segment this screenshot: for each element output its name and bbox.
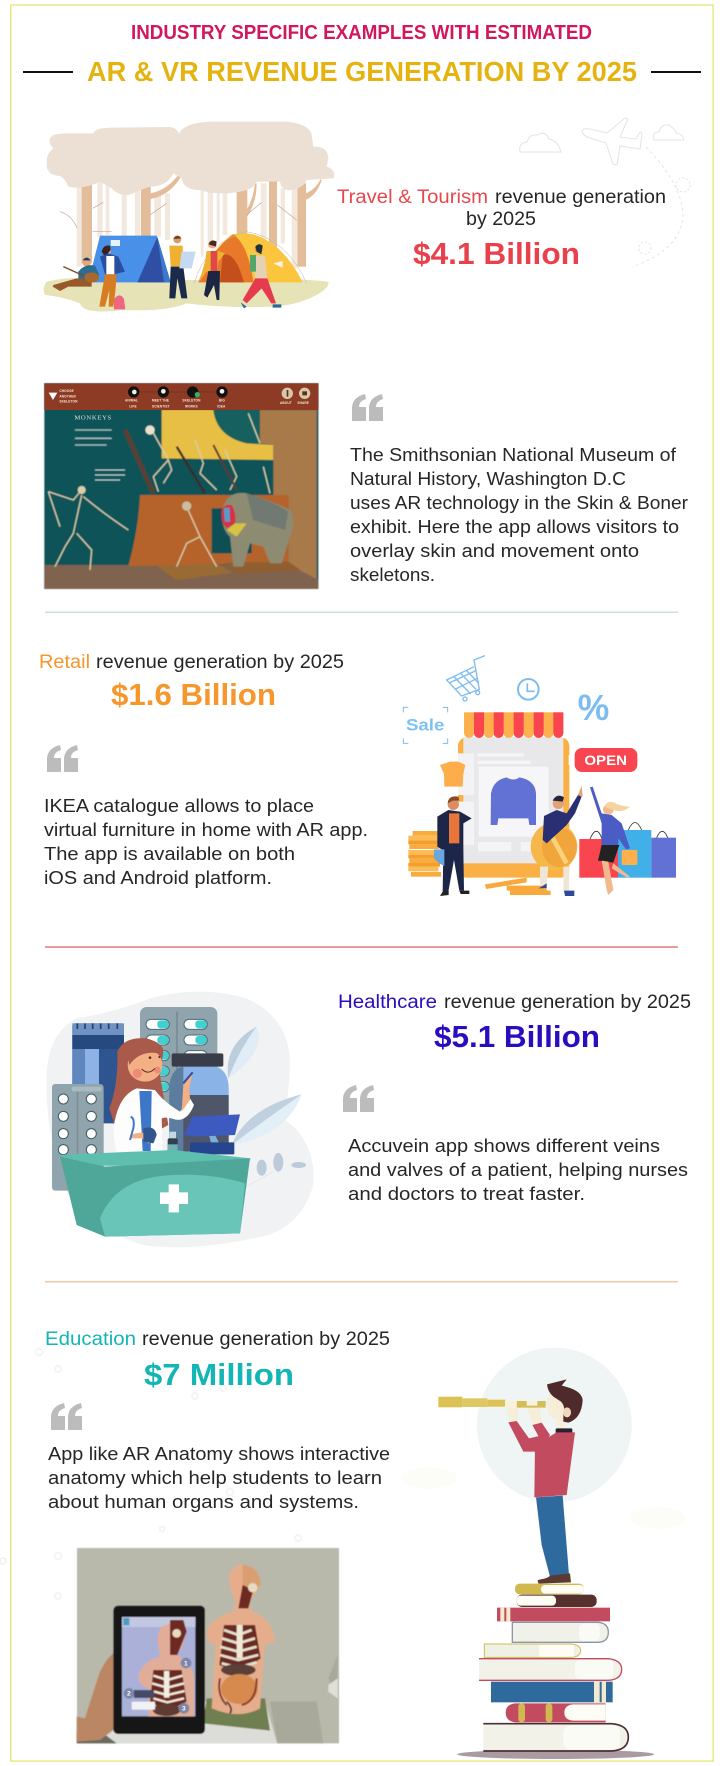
anatomy torso (207, 1565, 275, 1714)
storefront phone (458, 737, 569, 878)
panel: travel revenue text (337, 187, 666, 271)
small medicine bottle (168, 1132, 178, 1158)
value: retail revenue: $1.6 Billion (111, 677, 276, 712)
photo app header bar: SKELETON (182, 399, 201, 403)
telescope (438, 1397, 546, 1408)
photo app header bar: ABOUT (280, 401, 292, 405)
text: smithsonian description: overlay skin and movement onto (350, 541, 639, 561)
icon: quotation mark retail (47, 745, 78, 772)
doctor (109, 1038, 194, 1152)
text: ikea description: iOS and Android platform. (44, 868, 272, 888)
photo app header bar: SCIENTIST (152, 404, 170, 408)
photo app header bar: SKELETON (59, 400, 78, 404)
person: hiker (241, 244, 283, 308)
panel: education revenue text (45, 1329, 390, 1392)
text: smithsonian description: uses AR technology in the Skin & Boner (350, 493, 688, 513)
photo: anatomy model with tablet: 1 (184, 1660, 188, 1667)
icon: medical cross (160, 1184, 188, 1212)
photo app header bar: LIFE (129, 404, 137, 408)
dashed flight path (632, 147, 683, 267)
text: accuvein description (348, 1136, 688, 1204)
photo: anatomy model with tablet: 3 (182, 1706, 186, 1713)
text: ikea description: virtual furniture in home with AR app. (44, 820, 368, 840)
text: smithsonian description: The Smithsonian National Museum of (350, 445, 677, 465)
photo app header bar: MEET THE (152, 399, 169, 403)
text: ikea description: IKEA catalogue allows to place (44, 796, 314, 816)
panel: man on books illustration (438, 1348, 654, 1759)
panel: healthcare revenue text: revenue generation by 2025 (444, 992, 691, 1013)
monitor (184, 1114, 240, 1154)
value: healthcare revenue: $5.1 Billion (434, 1019, 600, 1054)
label: healthcare category: Healthcare (338, 992, 437, 1013)
icon: cloud right (653, 125, 684, 140)
value: travel revenue: $4.1 Billion (413, 236, 580, 271)
background circle (477, 1348, 632, 1502)
icon: clock (518, 679, 539, 700)
heading: line one: INDUSTRY SPECIFIC EXAMPLES WITH ESTIMATED (131, 22, 592, 44)
text: accuvein description: and valves of a patient, helping nurses (348, 1160, 688, 1180)
panel: retail revenue text: revenue generation by 2025 (96, 652, 344, 673)
text: ikea description: The app is available on both (44, 844, 295, 864)
label: retail category: Retail (39, 652, 90, 673)
panel: retail illustration (403, 656, 676, 896)
reception desk (57, 1150, 251, 1237)
photo app header bar: WORKS (185, 404, 198, 408)
icon: quotation mark smithsonian (352, 394, 383, 421)
photo app header bar: CHOOSE (59, 389, 74, 393)
person: man on phone (434, 796, 472, 896)
tablet (113, 1606, 205, 1734)
text: ar anatomy description: about human organs and systems. (48, 1492, 359, 1512)
tree canopy (47, 122, 334, 195)
label: education category: Education (45, 1329, 136, 1350)
photo app header bar (44, 383, 318, 410)
photo: smithsonian skeleton exhibit: MONKEYS (74, 414, 112, 421)
orange tent (194, 232, 307, 283)
photo app header bar: SHARE (297, 401, 309, 405)
heading: line two: AR & VR REVENUE GENERATION BY 2025 (87, 56, 637, 87)
text: ikea description (44, 796, 368, 888)
background blob (46, 992, 314, 1247)
panel: healthcare revenue text (338, 992, 691, 1054)
skeletons (48, 413, 270, 570)
text: smithsonian description (350, 445, 688, 585)
mandrill (222, 493, 293, 567)
AR callouts (181, 1658, 191, 1668)
panel: travel revenue text: revenue generation (495, 187, 666, 208)
panel: education revenue text: revenue generation by 2025 (142, 1329, 390, 1350)
panel: header (23, 22, 701, 87)
text: ar anatomy description: anatomy which help students to learn (48, 1468, 382, 1488)
shadow (457, 1750, 654, 1759)
loose coins (485, 878, 551, 895)
value: education revenue: $7 Million (144, 1357, 294, 1392)
label: sale tag (403, 707, 448, 743)
panel: healthcare illustration (46, 992, 314, 1247)
person: guitar player (53, 258, 99, 291)
faint background pins and clouds (0, 1348, 686, 1599)
photo app header bar: ANIMAL (125, 399, 138, 403)
label: travel category: Travel & Tourism (337, 187, 488, 208)
photo: smithsonian skeleton exhibit (44, 383, 318, 589)
icon: airplane (582, 118, 642, 165)
awning (464, 712, 563, 738)
bottle right (169, 1053, 229, 1152)
person: man high five (539, 786, 583, 896)
icon: quotation mark education (51, 1403, 82, 1430)
ground (44, 278, 328, 311)
text: ar anatomy description (48, 1444, 390, 1512)
panel: retail revenue text (39, 652, 344, 712)
person: woman high five (590, 787, 637, 895)
icon: cloud left (520, 133, 561, 152)
text: smithsonian description: skeletons. (350, 565, 435, 585)
icon: quotation mark healthcare (343, 1085, 374, 1112)
panel: travel revenue text: by 2025 (466, 209, 536, 230)
hand (77, 1653, 120, 1742)
text: smithsonian description: Natural History, Washington D.C (350, 469, 626, 489)
person: woman in yellow coat (199, 240, 225, 300)
sign: open (569, 748, 637, 772)
person: woman on phone (99, 245, 125, 309)
photo app header bar: BIG (219, 399, 225, 403)
person: man with map (169, 235, 196, 298)
photo: anatomy model with tablet: 2 (127, 1691, 131, 1698)
panel: travel decoration plane and clouds (520, 118, 690, 267)
pill blister front (52, 1084, 104, 1191)
panel: travel and tourism illustration (44, 122, 334, 311)
coin large (531, 823, 577, 871)
text: smithsonian description: exhibit. Here the app allows visitors to (350, 517, 679, 537)
icon: t-shirt (440, 762, 465, 787)
leaves (228, 1027, 306, 1188)
text: accuvein description: Accuvein app shows different veins (348, 1136, 660, 1156)
icon: percent: % (578, 687, 609, 728)
blue tent (88, 236, 171, 282)
man (507, 1379, 583, 1584)
photo app header bar: IDEA (217, 404, 226, 408)
bottle dark blue (72, 1023, 124, 1123)
book stack (479, 1584, 628, 1751)
icon: shopping cart (447, 656, 485, 701)
text: accuvein description: and doctors to treat faster. (348, 1184, 585, 1204)
coin stack left (408, 831, 441, 877)
text: ar anatomy description: App like AR Anatomy shows interactive (48, 1444, 390, 1464)
photo: anatomy model with tablet (77, 1548, 339, 1743)
sign: open: OPEN (584, 752, 627, 768)
photo app header bar: ANOTHER (59, 394, 76, 398)
shopping bags (579, 822, 676, 878)
pill blister back (140, 1007, 217, 1118)
label: sale tag: Sale (406, 716, 444, 735)
